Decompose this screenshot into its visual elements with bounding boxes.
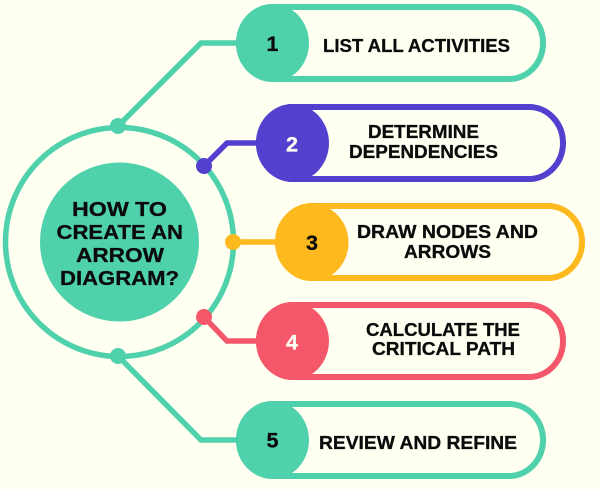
step 1: LIST ALL ACTIVITIES: [323, 36, 510, 56]
step 4: [256, 302, 563, 380]
connector 3: [225, 234, 285, 250]
connector 2: [196, 143, 265, 174]
step 3: [276, 204, 582, 281]
step 4: CRITICAL PATH: [372, 339, 515, 359]
step 2: DEPENDENCIES: [349, 142, 498, 162]
step 5: [236, 401, 543, 479]
step 2: 2: [286, 132, 298, 156]
connector 5: [110, 348, 245, 440]
connector 4: [196, 309, 265, 341]
title: HOW TO: [72, 198, 167, 221]
step 1: [236, 4, 543, 82]
step 4: 4: [286, 330, 298, 354]
step 1: 1: [267, 32, 279, 56]
outer ring: [6, 128, 234, 356]
step 2: DETERMINE: [368, 122, 479, 142]
step 5: REVIEW AND REFINE: [319, 433, 517, 453]
connector 1: [110, 43, 245, 134]
step 5: 5: [267, 428, 279, 452]
step 3: ARROWS: [404, 242, 491, 262]
title: CREATE AN: [56, 221, 183, 244]
inner circle: [40, 162, 199, 322]
step 2: [256, 104, 563, 182]
step 3: DRAW NODES AND: [357, 222, 538, 242]
step 3: 3: [306, 231, 318, 255]
step 4: CALCULATE THE: [366, 320, 520, 340]
central hub: [6, 128, 234, 356]
title: ARROW: [76, 244, 165, 267]
title: DIAGRAM?: [60, 267, 179, 290]
title: [56, 198, 183, 290]
